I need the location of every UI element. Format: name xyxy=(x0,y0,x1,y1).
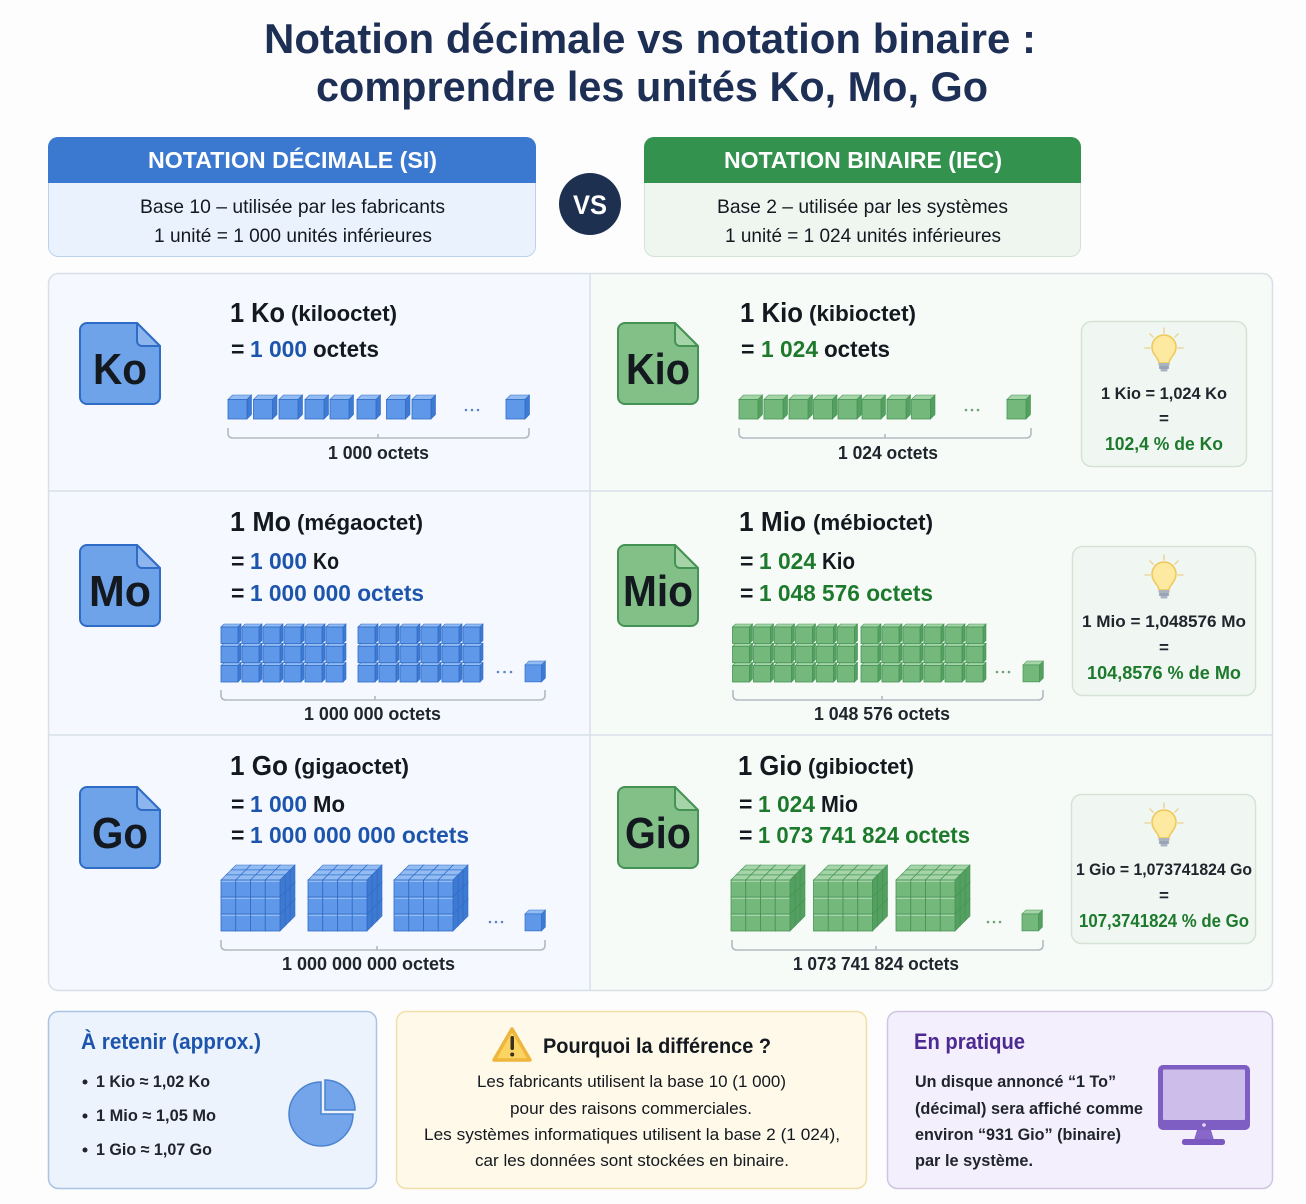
brace label: 1 048 576 octets: 1 048 576 octets xyxy=(814,703,950,724)
brace label: 1 024 octets: 1 024 octets xyxy=(838,442,938,463)
panel: pourquoi la différence: Pourquoi la différence ? xyxy=(543,1035,771,1058)
text block: exemple disque: Un disque annoncé “1 To” xyxy=(915,1072,1116,1091)
definition: kibioctet: octets xyxy=(824,336,890,362)
row: Mo xyxy=(80,506,545,724)
definition: mégaoctet: = xyxy=(231,580,244,606)
panel: notation binaire xyxy=(644,137,1081,256)
title xyxy=(264,15,1036,110)
definition: gigaoctet: (gigaoctet) xyxy=(294,754,409,779)
row: Gio xyxy=(618,750,1256,974)
definition: kibioctet: 1 Kio xyxy=(740,297,803,328)
icon: Gio file: Gio xyxy=(625,809,691,858)
definition: kilooctet: = xyxy=(231,336,244,362)
icon: Go file: Go xyxy=(92,809,148,858)
definition: kibioctet xyxy=(740,297,916,362)
definition: mégaoctet: (mégaoctet) xyxy=(297,510,423,535)
callout: 104,8576 % xyxy=(1072,546,1256,696)
row: Go xyxy=(80,750,545,974)
brace label: 1 000 000 000 octets: 1 000 000 000 octets xyxy=(282,953,455,974)
panel: à retenir xyxy=(48,1012,376,1188)
callout: 102,4 % xyxy=(1082,322,1246,466)
text block: exemple disque: par le système. xyxy=(915,1151,1033,1170)
definition: mébioctet: 1 024 xyxy=(759,548,816,574)
definition: gigaoctet: Mo xyxy=(313,791,345,817)
definition: mégaoctet xyxy=(230,506,424,606)
definition: gigaoctet xyxy=(230,750,469,848)
definition: mégaoctet: Ko xyxy=(313,548,339,574)
definition: mégaoctet: 1 000 000 octets xyxy=(250,580,424,606)
panel: en pratique: En pratique xyxy=(914,1029,1025,1054)
icon: pie chart xyxy=(289,1080,355,1146)
icon: Ko file xyxy=(80,323,160,404)
definition: mégaoctet: 1 000 xyxy=(250,548,307,574)
brace label: 1 000 000 000 octets xyxy=(221,940,545,974)
definition: mébioctet: (mébioctet) xyxy=(813,510,933,535)
definition: mébioctet: = xyxy=(740,548,753,574)
text block: explication xyxy=(424,1072,840,1170)
icon: Go file xyxy=(80,787,160,868)
panel: en pratique xyxy=(888,1012,1272,1188)
vs badge: VS xyxy=(573,190,607,220)
icon: Kio file xyxy=(618,323,698,404)
definition: mébioctet: Kio xyxy=(822,548,855,574)
panel: notation binaire: 1 unité = 1 024 unités inférieures xyxy=(725,225,1001,247)
definition: kilooctet: octets xyxy=(313,336,379,362)
callout: 107,3741824 %: 107,3741824 % de Go xyxy=(1079,911,1249,931)
callout: 104,8576 %: 104,8576 % de Mo xyxy=(1087,663,1241,683)
cubes: 1 073 741 824 octets xyxy=(731,865,1042,931)
definition: gibioctet: = xyxy=(739,822,752,848)
definition: gigaoctet: 1 000 000 000 octets xyxy=(250,822,469,848)
icon: Mio file xyxy=(618,545,698,626)
cubes: 1 000 000 octets xyxy=(221,624,545,682)
definition: kibioctet: (kibioctet) xyxy=(809,301,916,326)
cubes: 1 000 octets xyxy=(228,395,530,419)
callout: 107,3741824 % xyxy=(1072,794,1256,944)
list: approximations: 1 Gio ≈ 1,07 Go xyxy=(96,1140,212,1159)
brace label: 1 000 octets xyxy=(228,428,529,463)
definition: gibioctet: 1 Gio xyxy=(738,750,802,781)
definition: kilooctet: 1 000 xyxy=(250,336,307,362)
callout: 107,3741824 %: = xyxy=(1159,886,1169,905)
definition: kilooctet: (kilooctet) xyxy=(291,301,397,326)
brace label: 1 073 741 824 octets xyxy=(732,940,1043,974)
callout: 102,4 %: 1 Kio = 1,024 Ko xyxy=(1101,384,1227,403)
icon: Mo file xyxy=(80,545,160,626)
vs badge xyxy=(559,173,621,235)
definition: mébioctet: = xyxy=(740,580,753,606)
callout: 104,8576 %: = xyxy=(1159,638,1169,657)
panel: notation décimale: 1 unité = 1 000 unités inférieures xyxy=(154,225,432,247)
icon: Ko file: Ko xyxy=(93,345,147,394)
definition: gigaoctet: = xyxy=(231,791,244,817)
definition: gibioctet: 1 073 741 824 octets xyxy=(758,822,970,848)
title: comprendre les unités Ko, Mo, Go xyxy=(316,63,988,110)
brace label: 1 024 octets xyxy=(739,428,1031,463)
cubes: 1 048 576 octets xyxy=(732,624,1043,682)
definition: mébioctet: 1 Mio xyxy=(739,506,806,537)
brace label: 1 048 576 octets xyxy=(733,690,1043,724)
icon: Mio file: Mio xyxy=(623,567,693,616)
text block: explication: Les fabricants utilisent la base 10 (1 000) xyxy=(477,1072,786,1091)
panel: à retenir: À retenir (approx.) xyxy=(81,1029,261,1054)
definition: gigaoctet: 1 Go xyxy=(230,750,288,781)
list: approximations: 1 Kio ≈ 1,02 Ko xyxy=(96,1072,210,1091)
callout: 102,4 %: = xyxy=(1159,409,1169,428)
definition: kilooctet: 1 Ko xyxy=(230,297,285,328)
definition: gigaoctet: = xyxy=(231,822,244,848)
definition: gigaoctet: 1 000 xyxy=(250,791,307,817)
text block: exemple disque: (décimal) sera affiché comme xyxy=(915,1099,1143,1118)
definition: gibioctet: = xyxy=(739,791,752,817)
definition: mébioctet: 1 048 576 octets xyxy=(759,580,933,606)
panel: pourquoi la différence xyxy=(396,1012,866,1188)
panel: notation décimale xyxy=(48,137,536,256)
row: Mio xyxy=(618,506,1256,724)
panel: notation décimale: NOTATION DÉCIMALE (SI) xyxy=(148,146,437,173)
brace label: 1 000 000 octets xyxy=(221,690,545,724)
definition: kibioctet: = xyxy=(741,336,754,362)
callout: 104,8576 %: 1 Mio = 1,048576 Mo xyxy=(1082,612,1246,631)
icon: Mo file: Mo xyxy=(89,567,151,616)
icon: monitor xyxy=(1158,1065,1250,1145)
title: Notation décimale vs notation binaire : xyxy=(264,15,1036,62)
callout: 107,3741824 %: 1 Gio = 1,073741824 Go xyxy=(1076,860,1252,879)
icon: Gio file xyxy=(618,787,698,868)
icon: Kio file: Kio xyxy=(626,345,690,394)
panel: notation binaire: Base 2 – utilisée par les systèmes xyxy=(717,196,1008,218)
brace label: 1 073 741 824 octets: 1 073 741 824 octets xyxy=(793,953,959,974)
brace label: 1 000 000 octets: 1 000 000 octets xyxy=(304,703,441,724)
definition: kilooctet xyxy=(230,297,397,362)
list: approximations xyxy=(82,1072,216,1159)
callout: 102,4 %: 102,4 % de Ko xyxy=(1105,434,1223,454)
definition: mégaoctet: = xyxy=(231,548,244,574)
text block: explication: pour des raisons commerciales. xyxy=(510,1099,752,1118)
definition: gibioctet: 1 024 xyxy=(758,791,815,817)
brace label: 1 000 octets: 1 000 octets xyxy=(328,442,429,463)
panel: notation binaire: NOTATION BINAIRE (IEC) xyxy=(724,147,1002,173)
definition: mégaoctet: 1 Mo xyxy=(230,506,291,537)
text block: explication: Les systèmes informatiques utilisent la base 2 (1 024), xyxy=(424,1125,840,1144)
panel: notation décimale: Base 10 – utilisée par les fabricants xyxy=(140,196,445,218)
row: Kio xyxy=(618,297,1246,466)
definition: gibioctet: Mio xyxy=(821,791,858,817)
definition: mébioctet xyxy=(739,506,933,606)
panel: main comparison table xyxy=(48,274,1273,990)
list: approximations: 1 Mio ≈ 1,05 Mo xyxy=(96,1106,216,1125)
text block: exemple disque xyxy=(915,1072,1143,1170)
definition: kibioctet: 1 024 xyxy=(761,336,818,362)
definition: gibioctet: (gibioctet) xyxy=(808,754,914,779)
row: Ko xyxy=(80,297,530,463)
cubes: 1 000 000 000 octets xyxy=(221,865,545,931)
text block: exemple disque: environ “931 Gio” (binaire) xyxy=(915,1125,1121,1144)
definition: gibioctet xyxy=(738,750,970,848)
text block: explication: car les données sont stockées en binaire. xyxy=(475,1151,789,1170)
cubes: 1 024 octets xyxy=(739,395,1030,419)
icon: warning triangle xyxy=(494,1029,530,1060)
